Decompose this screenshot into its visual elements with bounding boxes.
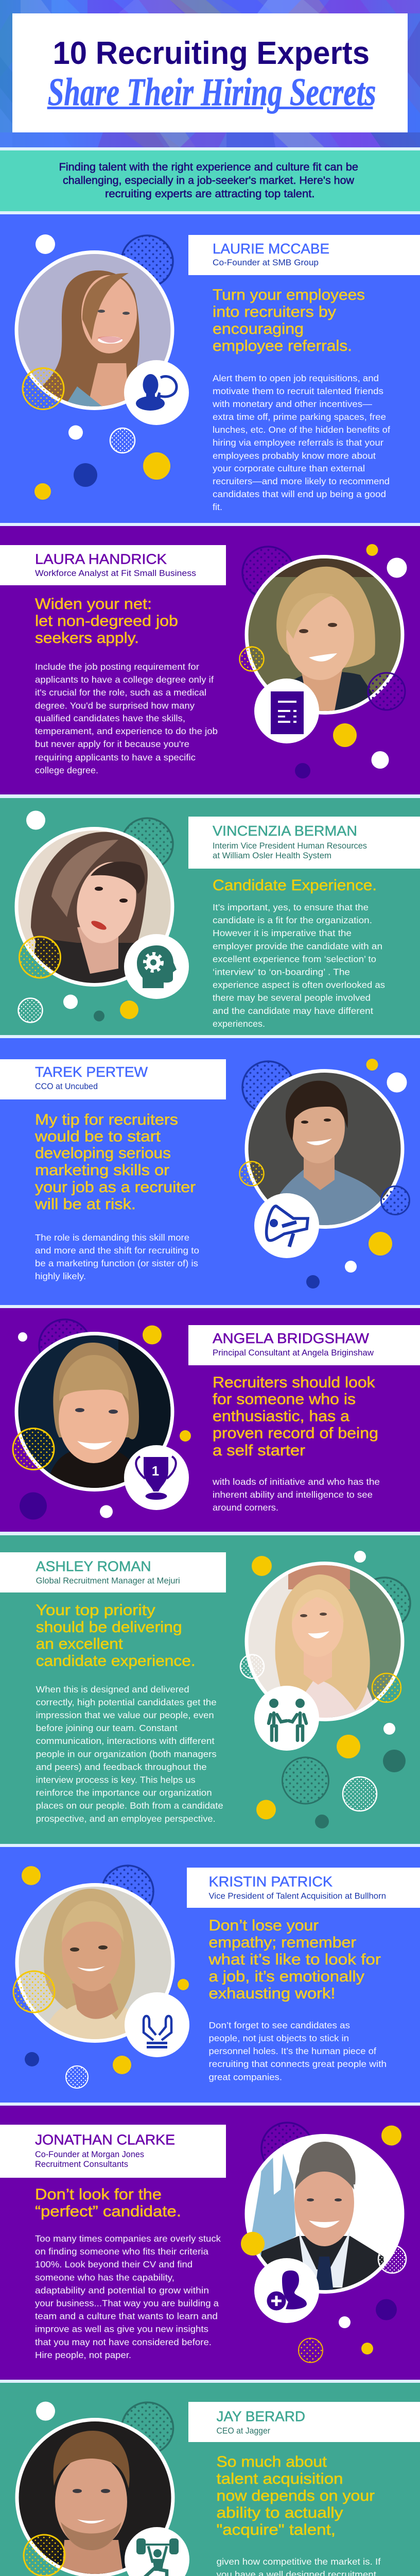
photo: Laurie McCabe <box>14 250 175 412</box>
body text: recruiting that connects great people with <box>209 2059 387 2069</box>
body text: lunches, etc. One of the hidden benefits of <box>213 425 390 435</box>
role: Workforce Analyst at Fit Small Business <box>35 569 196 578</box>
body text: fit. <box>213 502 222 512</box>
body text: with loads of initiative and who has the <box>212 1477 380 1487</box>
icon: head with gear <box>124 934 189 999</box>
headline: My tip for recruiters <box>35 1111 178 1128</box>
headline: Recruiters should look <box>213 1374 376 1391</box>
headline: ability to actually <box>216 2504 343 2521</box>
body text: great companies. <box>209 2072 282 2082</box>
panel: Vincenzia Berman <box>0 798 420 1035</box>
headline: what it’s like to look for <box>208 1951 381 1968</box>
role: Global Recruitment Manager at Mejuri <box>36 1577 180 1586</box>
headline: exhausting work! <box>209 1985 336 2002</box>
decorative dots <box>18 1319 191 1520</box>
headline: an excellent <box>36 1635 123 1653</box>
intro text <box>59 161 358 200</box>
body text: given how competitive the market is. If <box>216 2556 381 2567</box>
name card <box>188 817 420 869</box>
small yellow dotted circle <box>240 647 264 671</box>
icon: add person <box>254 2258 319 2323</box>
body text <box>209 2020 387 2082</box>
body text: 100%. Look beyond their CV and find <box>35 2259 192 2269</box>
name: ANGELA BRIDGSHAW <box>213 1330 370 1346</box>
name: TAREK PERTEW <box>35 1064 148 1080</box>
body text: around corners. <box>213 1502 278 1513</box>
body text: reinforce the importance our organization <box>36 1788 212 1798</box>
role: Interim Vice President Human Resources <box>213 841 367 851</box>
body text: applicants to have a college degree only if <box>35 674 214 685</box>
yellow dotted circle <box>23 368 64 409</box>
body text: qualified candidates have the skills, <box>35 713 185 723</box>
title line 1: 10 Recruiting Experts <box>52 36 370 71</box>
title underline <box>47 107 373 109</box>
decorative dots <box>19 811 173 1022</box>
body text: employees probably know more about <box>213 450 376 461</box>
headline: developing serious <box>35 1145 171 1162</box>
headline: empathy; remember <box>209 1934 356 1951</box>
body text: people in our organization (both managers <box>36 1749 217 1759</box>
headline: for someone who is <box>213 1391 356 1408</box>
body text: before joining our team. Constant <box>36 1723 178 1733</box>
photo: Angela Bridgshaw <box>14 1332 175 1492</box>
name card <box>188 1325 420 1365</box>
headline: So much about <box>216 2453 327 2470</box>
headline: encouraging <box>213 320 304 337</box>
name: JONATHAN CLARKE <box>35 2132 175 2147</box>
dark dotted circle <box>368 673 405 710</box>
headline: proven record of being <box>213 1425 378 1442</box>
yellow dotted circle <box>13 1971 55 2012</box>
role: Recruitment Consultants <box>35 2160 128 2169</box>
body text: that you may not have considered before. <box>35 2337 212 2347</box>
body text: with monetary and other incentives— <box>212 399 373 409</box>
body text: your corporate culture than external <box>213 463 365 473</box>
icon: trophy <box>124 1445 189 1510</box>
name: VINCENZIA BERMAN <box>213 823 357 839</box>
headline: candidate experience. <box>36 1653 196 1669</box>
body text: impression that we value our people, even <box>36 1710 214 1720</box>
yellow dotted circle <box>24 2535 65 2576</box>
body text: places on our people. Both from a candidate <box>36 1800 223 1810</box>
name card <box>188 235 420 275</box>
headline: marketing skills or <box>35 1162 169 1179</box>
body text: Too many times companies are overly stuck <box>35 2233 221 2244</box>
headline: Candidate Experience. <box>213 877 377 894</box>
body text: and peers) and feedback throughout the <box>36 1762 207 1772</box>
headline <box>213 1374 378 1459</box>
yellow dotted circle <box>13 1428 54 1469</box>
body text: people, not just objects to stick in <box>209 2033 349 2043</box>
body text: adaptability and potential to grow within <box>35 2285 209 2296</box>
body text: interview process is key. This helps us <box>36 1774 196 1785</box>
body text: temperament, and experience to do the job <box>35 726 218 736</box>
body text: correctly, high potential candidates get the <box>36 1697 217 1707</box>
body text: but never apply for it because you're <box>35 739 189 749</box>
headline: employee referrals. <box>213 337 352 354</box>
headline <box>35 2186 181 2220</box>
name: LAURIE MCCABE <box>213 241 329 257</box>
role: CCO at Uncubed <box>35 1082 98 1091</box>
icon: document <box>254 679 319 743</box>
headline: talent acquisition <box>216 2470 343 2487</box>
panel: Laurie McCabe <box>0 214 420 523</box>
body text: highly likely. <box>35 1271 86 1281</box>
decorative dots <box>242 544 407 778</box>
yellow circle over photo <box>241 2232 265 2256</box>
body text: be a marketing function (or sister of) is <box>35 1258 198 1268</box>
photo: Jay Berard <box>15 2418 175 2576</box>
white dotted circle <box>378 2245 406 2273</box>
headline: Don’t look for the <box>35 2186 162 2203</box>
photo: Ashley Roman <box>245 1562 407 1721</box>
headline <box>213 286 365 354</box>
yellow dotted circle <box>20 937 61 978</box>
photo: Vincenzia Berman <box>14 827 175 987</box>
name card <box>0 2125 226 2178</box>
photo: Kristin Patrick <box>15 1883 175 2043</box>
body text <box>35 662 218 775</box>
body text <box>35 2233 221 2360</box>
body text: team and a culture that wants to learn and <box>35 2311 218 2321</box>
headline: "acquire" talent, <box>216 2521 336 2538</box>
headline <box>34 1111 196 1213</box>
headline <box>216 2453 375 2538</box>
yellow dotted circle <box>372 1673 401 1702</box>
name card <box>0 1059 226 1099</box>
name: KRISTIN PATRICK <box>209 1873 332 1890</box>
intro text: recruiting experts are attracting top talent. <box>105 188 315 200</box>
role: Co-Founder at Morgan Jones <box>35 2150 144 2159</box>
body text: your business...That way you are building a <box>35 2298 219 2308</box>
body text: experience aspect is often overlooked as <box>213 980 385 990</box>
headline: enthusiastic, has a <box>213 1408 349 1425</box>
panel: Tarek Pertew <box>0 1038 420 1305</box>
panel: Ashley Roman <box>0 1535 420 1844</box>
photo: Tarek Pertew <box>245 1069 407 1229</box>
intro band <box>0 150 420 211</box>
photo: Laura Handrick <box>245 555 407 721</box>
small yellow dotted circle <box>240 1161 264 1186</box>
headline: Your top priority <box>36 1602 155 1619</box>
headline: will be at risk. <box>34 1196 136 1213</box>
role: CEO at Jagger <box>216 2427 270 2436</box>
panel: Laura Handrick <box>0 526 420 794</box>
role: Vice President of Talent Acquisition at Bullhorn <box>209 1892 386 1901</box>
role: Principal Consultant at Angela Briginshaw <box>213 1348 374 1358</box>
headline <box>36 1602 196 1669</box>
body text: motivate them to recruit talented friends <box>213 386 383 396</box>
name card <box>187 1868 420 1908</box>
intro text: Finding talent with the right experience and culture fit can be <box>59 161 358 173</box>
intro text: challenging, especially in a job-seeker's market. Here's how <box>63 175 355 187</box>
body text <box>212 1477 380 1513</box>
body text: experiences. <box>213 1019 265 1029</box>
headline: your job as a recruiter <box>35 1179 196 1196</box>
body text: It’s important, yes, to ensure that the <box>213 902 369 912</box>
body text: communication, interactions with different <box>36 1736 215 1746</box>
body text: improve as well as give you new insights <box>35 2324 208 2334</box>
body text: ‘interview’ to ‘on-boarding’ . The <box>213 967 350 977</box>
icon: two people <box>254 1686 319 1751</box>
headline: should be delivering <box>36 1619 182 1636</box>
body text <box>35 1232 199 1281</box>
headline: into recruiters by <box>213 303 336 320</box>
body text: on finding someone who fits their criteria <box>35 2246 208 2257</box>
role <box>35 2150 144 2169</box>
headline <box>35 596 178 647</box>
body text <box>36 1684 223 1824</box>
body text: and more and the shift for recruiting to <box>35 1245 199 1256</box>
decorative dots <box>22 1866 189 2088</box>
decorative dots <box>242 1059 407 1289</box>
body text: The role is demanding this skill more <box>35 1232 189 1243</box>
body text: candidate is a fit for the organization. <box>213 915 372 925</box>
body text: employer provide the candidate with an <box>213 941 382 951</box>
body text: Hire people, not paper. <box>35 2350 131 2360</box>
icon: raised hands <box>125 1992 189 2057</box>
name: JAY BERARD <box>216 2408 305 2425</box>
body text: someone who has the capability, <box>35 2272 174 2282</box>
body text: Alert them to open job requisitions, and <box>213 373 379 383</box>
decorative dots <box>261 2123 401 2363</box>
icon: person with speech bubble <box>124 360 189 425</box>
body text <box>213 902 385 1029</box>
headline: now depends on your <box>216 2487 375 2504</box>
panel: Angela Bridgshaw <box>0 1308 420 1532</box>
body text: personnel holes. It’s the human piece of <box>209 2046 376 2056</box>
panel: Kristin Patrick <box>0 1847 420 2103</box>
body text <box>216 2556 381 2576</box>
body text: prospective, and an employee perspective. <box>36 1814 216 1824</box>
body text: Don’t forget to see candidates as <box>209 2020 350 2030</box>
dark dotted circle <box>381 1186 410 1215</box>
body text <box>212 373 390 512</box>
headline: seekers apply. <box>35 630 139 647</box>
name card <box>188 2402 420 2442</box>
body text: degree. You'd be surprised how many <box>35 701 195 711</box>
body text: college degree. <box>35 765 98 775</box>
body text: candidates that will end up being a good <box>213 489 386 499</box>
headline: would be to start <box>34 1128 161 1145</box>
body text: extra time off, prime parking spaces, free <box>213 412 386 422</box>
headline: Widen your net: <box>35 596 152 613</box>
name: LAURA HANDRICK <box>35 551 167 567</box>
body text: requiring applicants to have a specific <box>35 752 196 762</box>
title card <box>12 13 408 132</box>
body text: it's crucial for the role, such as a medical <box>35 687 206 698</box>
decorative dots <box>34 234 173 500</box>
icon: weightlifter <box>125 2527 189 2576</box>
headline: “perfect” candidate. <box>35 2203 181 2220</box>
decorative dots <box>36 2402 177 2576</box>
photo: Jonathan Clarke <box>245 2134 407 2294</box>
decorative dots <box>252 1551 410 1828</box>
panel: Jonathan Clarke <box>0 2106 420 2380</box>
name: ASHLEY ROMAN <box>36 1558 151 1574</box>
panel: Jay Berard <box>0 2383 420 2576</box>
name card <box>0 1552 226 1592</box>
headline <box>208 1917 381 2002</box>
role: Co-Founder at SMB Group <box>213 258 319 267</box>
headline: Turn your employees <box>213 286 365 303</box>
headline: a self starter <box>213 1442 305 1459</box>
role: at William Osler Health System <box>213 851 331 860</box>
body text: Include the job posting requirement for <box>35 662 199 672</box>
headline: let non-degreed job <box>35 613 178 630</box>
white dotted circle <box>240 1655 264 1679</box>
header <box>0 0 420 147</box>
body text: hiring via employee referrals is that your <box>213 437 383 448</box>
body text: excellent experience from ‘selection’ to <box>213 954 376 964</box>
body text: inherent ability and intelligence to see <box>213 1489 373 1500</box>
role <box>213 841 367 860</box>
body text: When this is designed and delivered <box>36 1684 189 1694</box>
headline: a job, it’s emotionally <box>209 1968 364 1985</box>
headline: Don’t lose your <box>209 1917 319 1934</box>
body text: and the candidate may have different <box>213 1006 373 1016</box>
body text: However it is imperative that the <box>213 928 352 938</box>
trophy number: 1 <box>152 1463 159 1479</box>
name card <box>0 545 226 585</box>
body text: recruiters—and more likely to recommend <box>213 476 390 486</box>
icon: megaphone <box>254 1193 319 1258</box>
body text: there may be several people involved <box>213 992 371 1003</box>
